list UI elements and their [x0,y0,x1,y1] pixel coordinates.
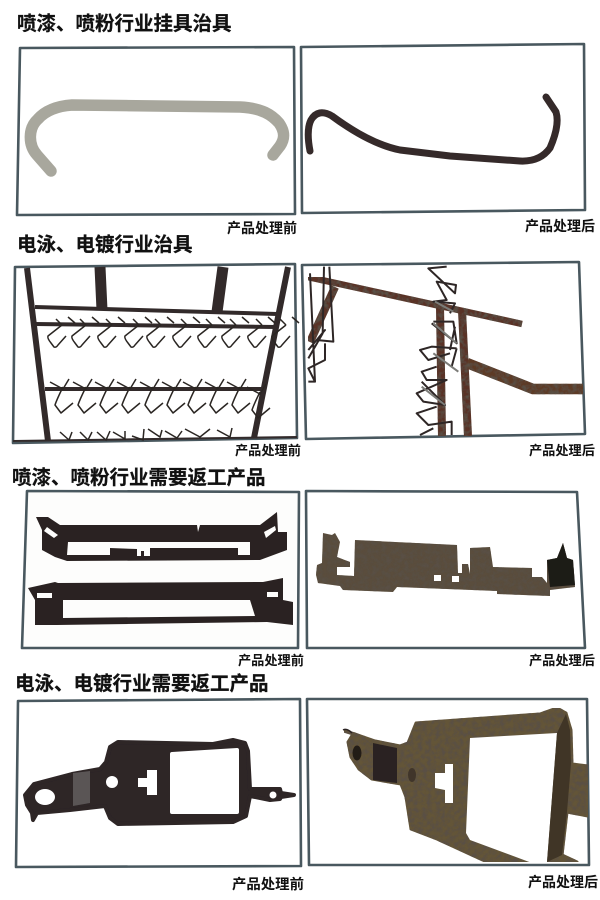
caption: before: 产品处理前 [235,442,301,458]
caption: after: 产品处理后 [528,874,598,890]
panel: fixture before treatment [17,47,295,215]
frame [301,44,585,213]
heading: spray painting fixtures: 喷漆、喷粉行业挂具治具 [17,13,232,35]
panel: plate before treatment [16,699,301,867]
grey coated hook [30,105,284,171]
heading: electroplating rework products: 电泳、电镀行业需要返工产品 [15,673,269,695]
window and key slot [435,733,557,863]
hooks row 3 [60,428,232,440]
hooks row 1 [48,317,299,347]
frame [22,491,299,648]
lower dark bracket [28,578,293,625]
stripped olive plate [344,708,588,862]
caption: after: 产品处理后 [529,442,595,458]
caption: before: 产品处理前 [232,875,304,893]
panel: rework before treatment [22,491,299,648]
wire tip [343,729,352,733]
upper dark bracket [36,512,287,561]
heading: electroplating fixtures: 电泳、电镀行业治具 [17,234,193,256]
panel: plate after treatment [307,699,589,865]
section 4: electroplating rework products [15,673,598,893]
dark bend band [373,743,397,783]
caption: before: 产品处理前 [238,652,304,668]
section 2: electroplating fixtures [13,234,595,458]
panel: fixture after treatment [301,44,585,213]
frame [16,699,301,867]
caption: after: 产品处理后 [525,218,595,234]
hooks row 2 [50,379,270,418]
plate holes and window [35,748,276,814]
dark side shadow [547,714,571,862]
frame [307,699,589,865]
dark metal plate [25,740,294,824]
section 3: spray rework products [12,467,595,668]
dark end plate [547,543,575,587]
stripped mottled bracket [316,533,575,596]
heading: spray rework products: 喷漆、喷粉行业需要返工产品 [12,467,266,489]
caption: after: 产品处理后 [529,652,595,668]
panel: rack after treatment [302,262,585,439]
panel: rework after treatment [306,491,585,648]
caption: before: 产品处理前 [227,220,297,236]
bend highlight [73,771,90,806]
section 1: spray fixtures [17,13,595,236]
wire hooks [308,267,458,435]
frame [302,262,585,439]
panel: rack before treatment [13,264,299,443]
frame [17,47,295,215]
plate holes [352,746,416,782]
rack frame [13,267,297,441]
frame [13,264,297,443]
frame [306,491,585,648]
rusty rack bars [308,277,583,436]
stripped dark hook [308,97,557,161]
